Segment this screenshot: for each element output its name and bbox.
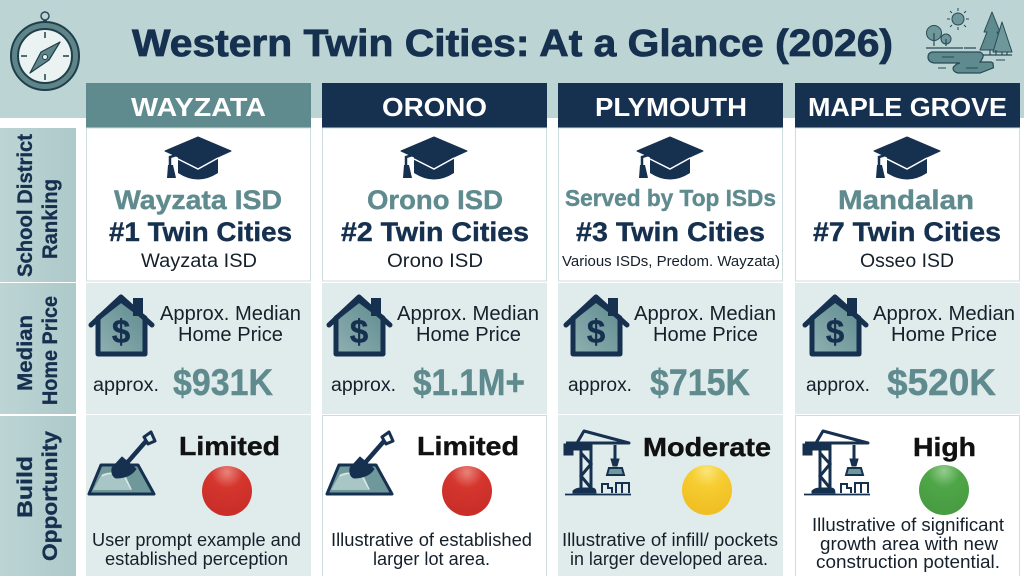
school cell: Maple Grove: [796, 128, 1020, 281]
icon: landscape: [926, 8, 1012, 73]
price cell: Wayzata: Home Price: [178, 324, 283, 346]
panel: Orono column: [322, 83, 547, 576]
panel: row label median home price: Home Price: [39, 296, 62, 405]
school cell: Orono: Orono ISD: [367, 185, 503, 215]
school cell: Orono: [322, 128, 546, 281]
column heading: Plymouth: PLYMOUTH: [595, 92, 747, 122]
price cell: Maple Grove: approx.: [806, 375, 870, 396]
column heading: Maple Grove: [795, 83, 1020, 128]
column heading: Plymouth: [558, 83, 783, 128]
build cell: Wayzata: Limited: [179, 431, 280, 461]
build cell: Maple Grove: construction potential.: [816, 552, 1000, 572]
school cell: Plymouth: Served by Top ISDs: [565, 185, 776, 211]
build cell: Plymouth: Moderate: [643, 432, 771, 462]
price cell: Plymouth: $: [587, 313, 605, 350]
column heading: Wayzata: [86, 83, 311, 128]
panel: row label median home price: [0, 283, 76, 414]
school cell: Maple Grove: Osseo ISD: [860, 251, 954, 272]
school cell: Plymouth: [558, 128, 782, 281]
school cell: Wayzata: [86, 128, 310, 281]
build cell: Maple Grove: High: [913, 432, 976, 462]
price cell: Orono: Home Price: [416, 324, 521, 346]
build cell: Orono: Limited: [417, 431, 519, 461]
panel: row label build opportunity: [0, 416, 76, 576]
price cell: Maple Grove: $: [826, 313, 844, 350]
price cell: Orono: Approx. Median: [397, 303, 539, 325]
school cell: Plymouth: Various ISDs, Predom. Wayzata): [562, 254, 780, 270]
price cell: Plymouth: Home Price: [653, 324, 758, 346]
price cell: Plymouth: $715K: [650, 362, 750, 403]
build cell: Maple Grove: Illustrative of significant: [812, 515, 1004, 535]
panel: Maple Grove column: [795, 83, 1020, 576]
price cell: Orono: $1.1M+: [413, 362, 525, 403]
price cell: Wayzata: approx.: [93, 375, 159, 396]
build cell: Plymouth: Illustrative of infill/ pockets: [562, 530, 778, 550]
price cell: Maple Grove: [795, 283, 1020, 414]
icon: compass: [11, 12, 79, 90]
price cell: Plymouth: approx.: [568, 375, 632, 396]
header band: [0, 0, 1024, 118]
build cell: Orono: Illustrative of established: [331, 530, 532, 550]
column heading: Wayzata: WAYZATA: [131, 92, 266, 122]
price cell: Maple Grove: Approx. Median: [873, 303, 1015, 325]
column heading: Orono: [322, 83, 547, 128]
title: Western Twin Cities: At a Glance (2026): [132, 23, 893, 65]
panel: row label build opportunity: Opportunity: [39, 431, 62, 561]
school cell: Wayzata: Wayzata ISD: [114, 185, 282, 215]
school cell: Orono: Orono ISD: [387, 251, 483, 272]
build cell: Wayzata: established perception: [105, 549, 288, 569]
build cell: Maple Grove: [796, 416, 1020, 576]
build cell: Wayzata: [86, 415, 311, 576]
build cell: Orono: larger lot area.: [373, 549, 490, 569]
school cell: Plymouth: #3 Twin Cities: [576, 217, 765, 247]
price cell: Plymouth: [558, 283, 783, 414]
school cell: Wayzata: #1 Twin Cities: [109, 217, 292, 247]
school cell: Maple Grove: Mandalan: [838, 185, 974, 215]
price cell: Orono: $: [350, 313, 368, 350]
school cell: Maple Grove: #7 Twin Cities: [813, 217, 1001, 247]
build cell: Wayzata: User prompt example and: [92, 530, 301, 550]
panel: row label school district: [0, 128, 76, 282]
build cell: Maple Grove: growth area with new: [820, 534, 999, 554]
school cell: Orono: #2 Twin Cities: [341, 217, 529, 247]
build cell: Plymouth: [558, 415, 783, 576]
price cell: Wayzata: $931K: [173, 362, 273, 403]
panel: Wayzata column: [86, 83, 311, 576]
panel: row label school district: School District: [14, 134, 37, 277]
build cell: Plymouth: in larger developed area.: [570, 549, 768, 569]
price cell: Wayzata: [86, 283, 311, 414]
panel: row label median home price: Median: [14, 315, 37, 391]
panel: Plymouth column: [558, 83, 783, 576]
price cell: Plymouth: Approx. Median: [634, 303, 776, 325]
column heading: Maple Grove: MAPLE GROVE: [808, 92, 1007, 122]
price cell: Orono: [322, 283, 547, 414]
column heading: Orono: ORONO: [382, 92, 487, 122]
panel: row label school district: Ranking: [39, 179, 62, 259]
school cell: Wayzata: Wayzata ISD: [141, 251, 257, 272]
price cell: Maple Grove: $520K: [887, 362, 996, 403]
build cell: Orono: [322, 416, 546, 576]
panel: row label build opportunity: Build: [14, 456, 37, 518]
price cell: Wayzata: $: [112, 313, 130, 350]
price cell: Wayzata: Approx. Median: [160, 303, 301, 325]
price cell: Orono: approx.: [331, 375, 396, 396]
price cell: Maple Grove: Home Price: [891, 324, 997, 346]
